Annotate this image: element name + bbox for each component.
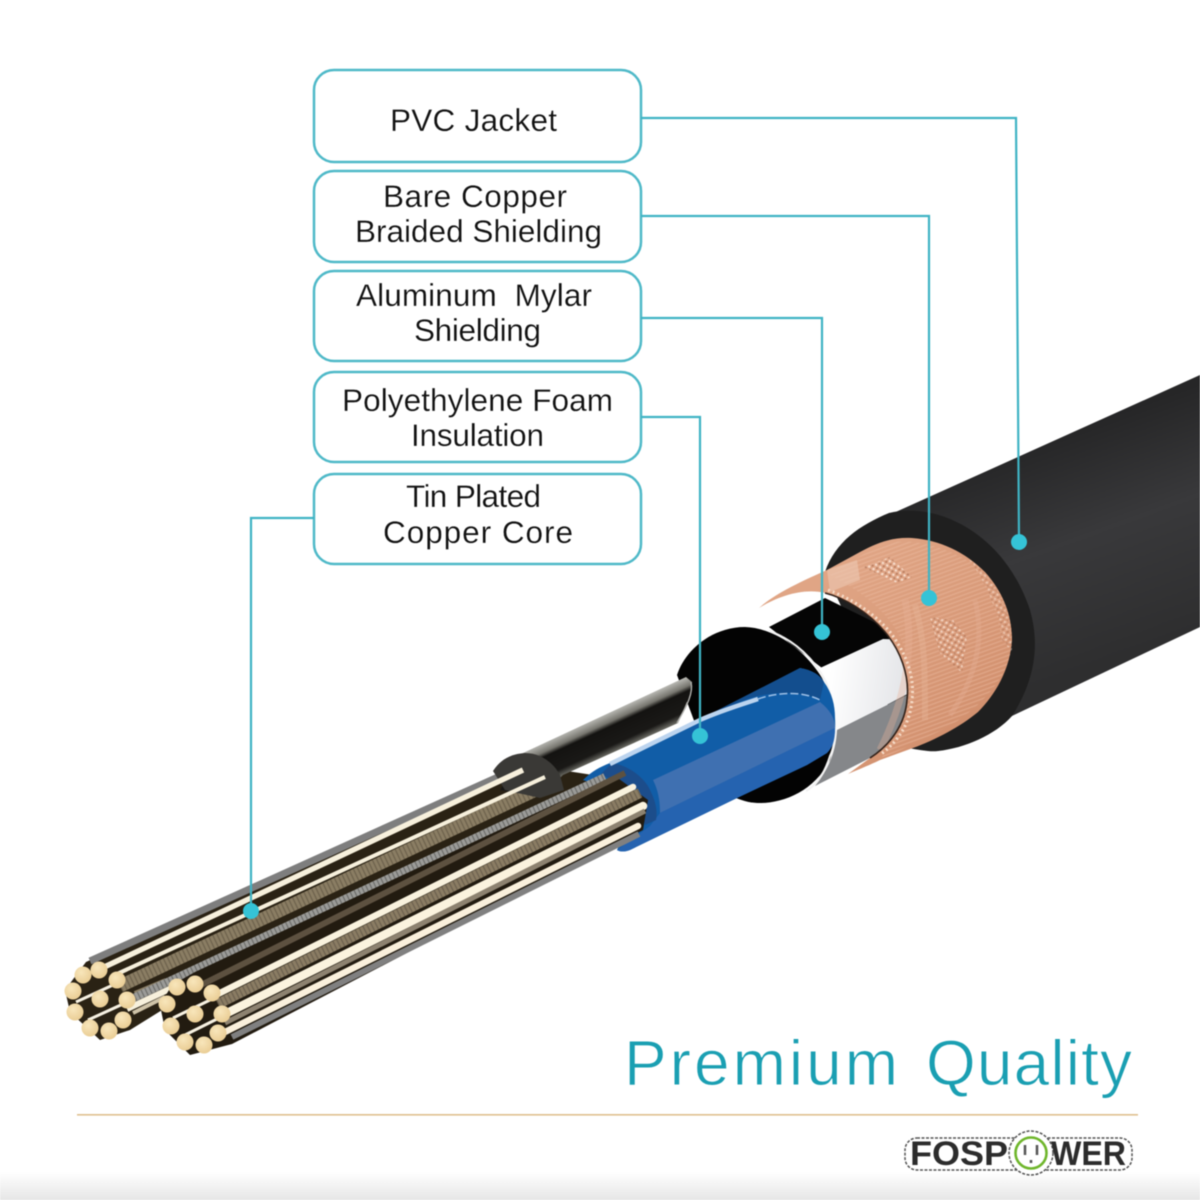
rear core wires upper layer xyxy=(100,770,613,1009)
label: Bare Copper Braided Shielding: Bare Copper xyxy=(383,178,567,214)
label: Tin Plated Copper Core: Copper Core xyxy=(383,514,573,550)
dielectric black disc xyxy=(677,627,834,803)
rear core wires lower layer xyxy=(65,764,612,1040)
PVC jacket body xyxy=(889,375,1200,751)
foam insulation blue tube xyxy=(583,668,835,852)
aluminum mylar black band xyxy=(769,598,905,668)
front core wires xyxy=(160,773,648,1055)
label: Polyethylene Foam Insulation: Insulation xyxy=(411,417,544,453)
label: PVC Jacket: PVC Jacket xyxy=(390,102,557,138)
logo: FOSPOWER: FOSP xyxy=(910,1135,1008,1173)
heading: Premium Quality: Quality xyxy=(926,1027,1132,1099)
label: Polyethylene Foam Insulation: Polyethylene Foam xyxy=(342,382,613,418)
label: Tin Plated Copper Core xyxy=(314,474,641,564)
PVC jacket end ring xyxy=(825,511,1035,751)
wire end caps xyxy=(64,962,230,1054)
label: Bare Copper Braided Shielding: Braided Shielding xyxy=(355,213,602,249)
leader: copper braid xyxy=(641,216,937,606)
aluminum mylar gray band xyxy=(815,691,915,786)
aluminum mylar white band xyxy=(820,639,915,731)
leader: foam insulation xyxy=(641,417,708,744)
label: Bare Copper Braided Shielding xyxy=(314,171,641,262)
inner black tube xyxy=(493,677,692,798)
label: Aluminum Mylar Shielding: Aluminum Mylar xyxy=(356,277,592,313)
label: Polyethylene Foam Insulation xyxy=(314,372,641,462)
label: PVC Jacket xyxy=(314,70,641,162)
label: Aluminum Mylar Shielding xyxy=(314,271,641,361)
label: Aluminum Mylar Shielding: Shielding xyxy=(414,312,541,348)
label: Tin Plated Copper Core: Tin Plated xyxy=(406,478,541,514)
leader: PVC Jacket xyxy=(641,118,1027,550)
heading: Premium Quality: Premium xyxy=(624,1027,898,1099)
copper braided shielding xyxy=(759,538,1012,774)
logo: FOSPOWER xyxy=(905,1131,1132,1175)
leader: copper core xyxy=(243,518,314,919)
leader: aluminum mylar xyxy=(641,318,830,640)
logo: FOSPOWER: WER xyxy=(1051,1135,1126,1173)
heading: Premium Quality xyxy=(624,1027,1132,1099)
divider line xyxy=(77,1114,1138,1116)
cable illustration xyxy=(64,375,1200,1055)
background footer fade xyxy=(0,1172,1200,1200)
